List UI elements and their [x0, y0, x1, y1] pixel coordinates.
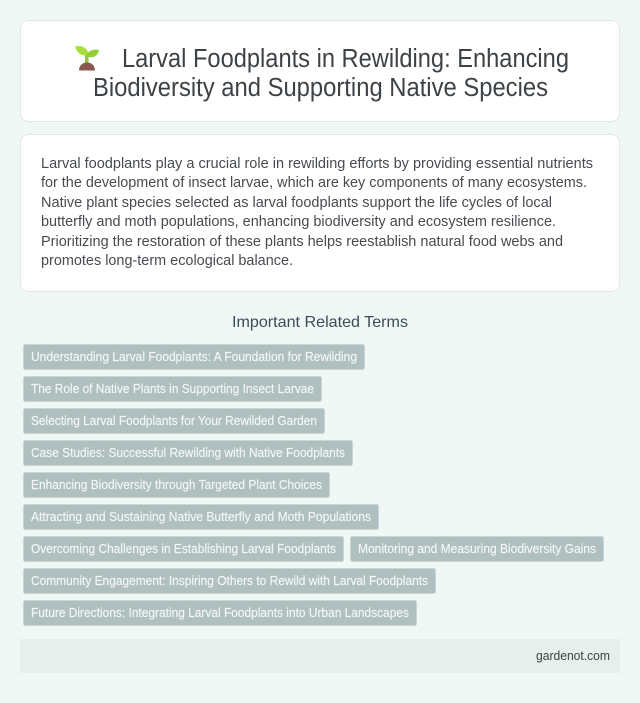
- tag 9: [24, 568, 436, 594]
- tag 7: [24, 536, 344, 562]
- tag 4: [24, 440, 352, 466]
- tag 6: Attracting and Sustaining Native Butterfly and Moth Populations: [31, 510, 371, 524]
- tag 6: [24, 504, 378, 530]
- footer: [20, 639, 620, 673]
- tag 5: Enhancing Biodiversity through Targeted Plant Choices: [31, 478, 322, 492]
- tag 1: Understanding Larval Foodplants: A Foundation for Rewilding: [31, 350, 357, 364]
- tag 3: [24, 408, 324, 434]
- title panel: [20, 20, 620, 122]
- tag 5: [24, 472, 330, 498]
- tag 3: Selecting Larval Foodplants for Your Rewilded Garden: [31, 414, 317, 428]
- heading: important related terms: Important Related Terms: [232, 314, 408, 331]
- summary text: butterfly and moth populations, enhancing biodiversity and ecosystem resilience.: [41, 214, 556, 230]
- tag 8: [350, 536, 604, 562]
- footer site name: gardenot.com: [536, 649, 610, 663]
- icon: seedling: [75, 46, 99, 70]
- tag 2: The Role of Native Plants in Supporting Insect Larvae: [31, 382, 314, 396]
- summary text: Native plant species selected as larval foodplants support the life cycles of local: [41, 195, 552, 211]
- tag 2: [24, 376, 322, 402]
- title text: Biodiversity and Supporting Native Species: [93, 74, 548, 102]
- title text: Larval Foodplants in Rewilding: Enhancing: [122, 45, 569, 73]
- summary text: Larval foodplants play a crucial role in rewilding efforts by providing essential nutrients: [41, 156, 593, 172]
- tag 9: Community Engagement: Inspiring Others to Rewild with Larval Foodplants: [31, 574, 428, 588]
- tag 8: Monitoring and Measuring Biodiversity Gains: [358, 542, 596, 556]
- tag 1: [24, 344, 364, 370]
- title text: [93, 45, 569, 102]
- tag 7: Overcoming Challenges in Establishing Larval Foodplants: [31, 542, 336, 556]
- summary text: promotes long-term ecological balance.: [41, 253, 293, 269]
- related terms tags: [24, 344, 604, 626]
- summary text: for the development of insect larvae, which are key components of many ecosystems.: [41, 175, 587, 191]
- tag 10: Future Directions: Integrating Larval Foodplants into Urban Landscapes: [31, 606, 409, 620]
- summary text: [41, 156, 593, 269]
- tag 10: [24, 600, 416, 626]
- summary text: Prioritizing the restoration of these plants helps reestablish natural food webs and: [41, 234, 563, 250]
- summary panel: [20, 134, 620, 292]
- tag 4: Case Studies: Successful Rewilding with Native Foodplants: [31, 446, 345, 460]
